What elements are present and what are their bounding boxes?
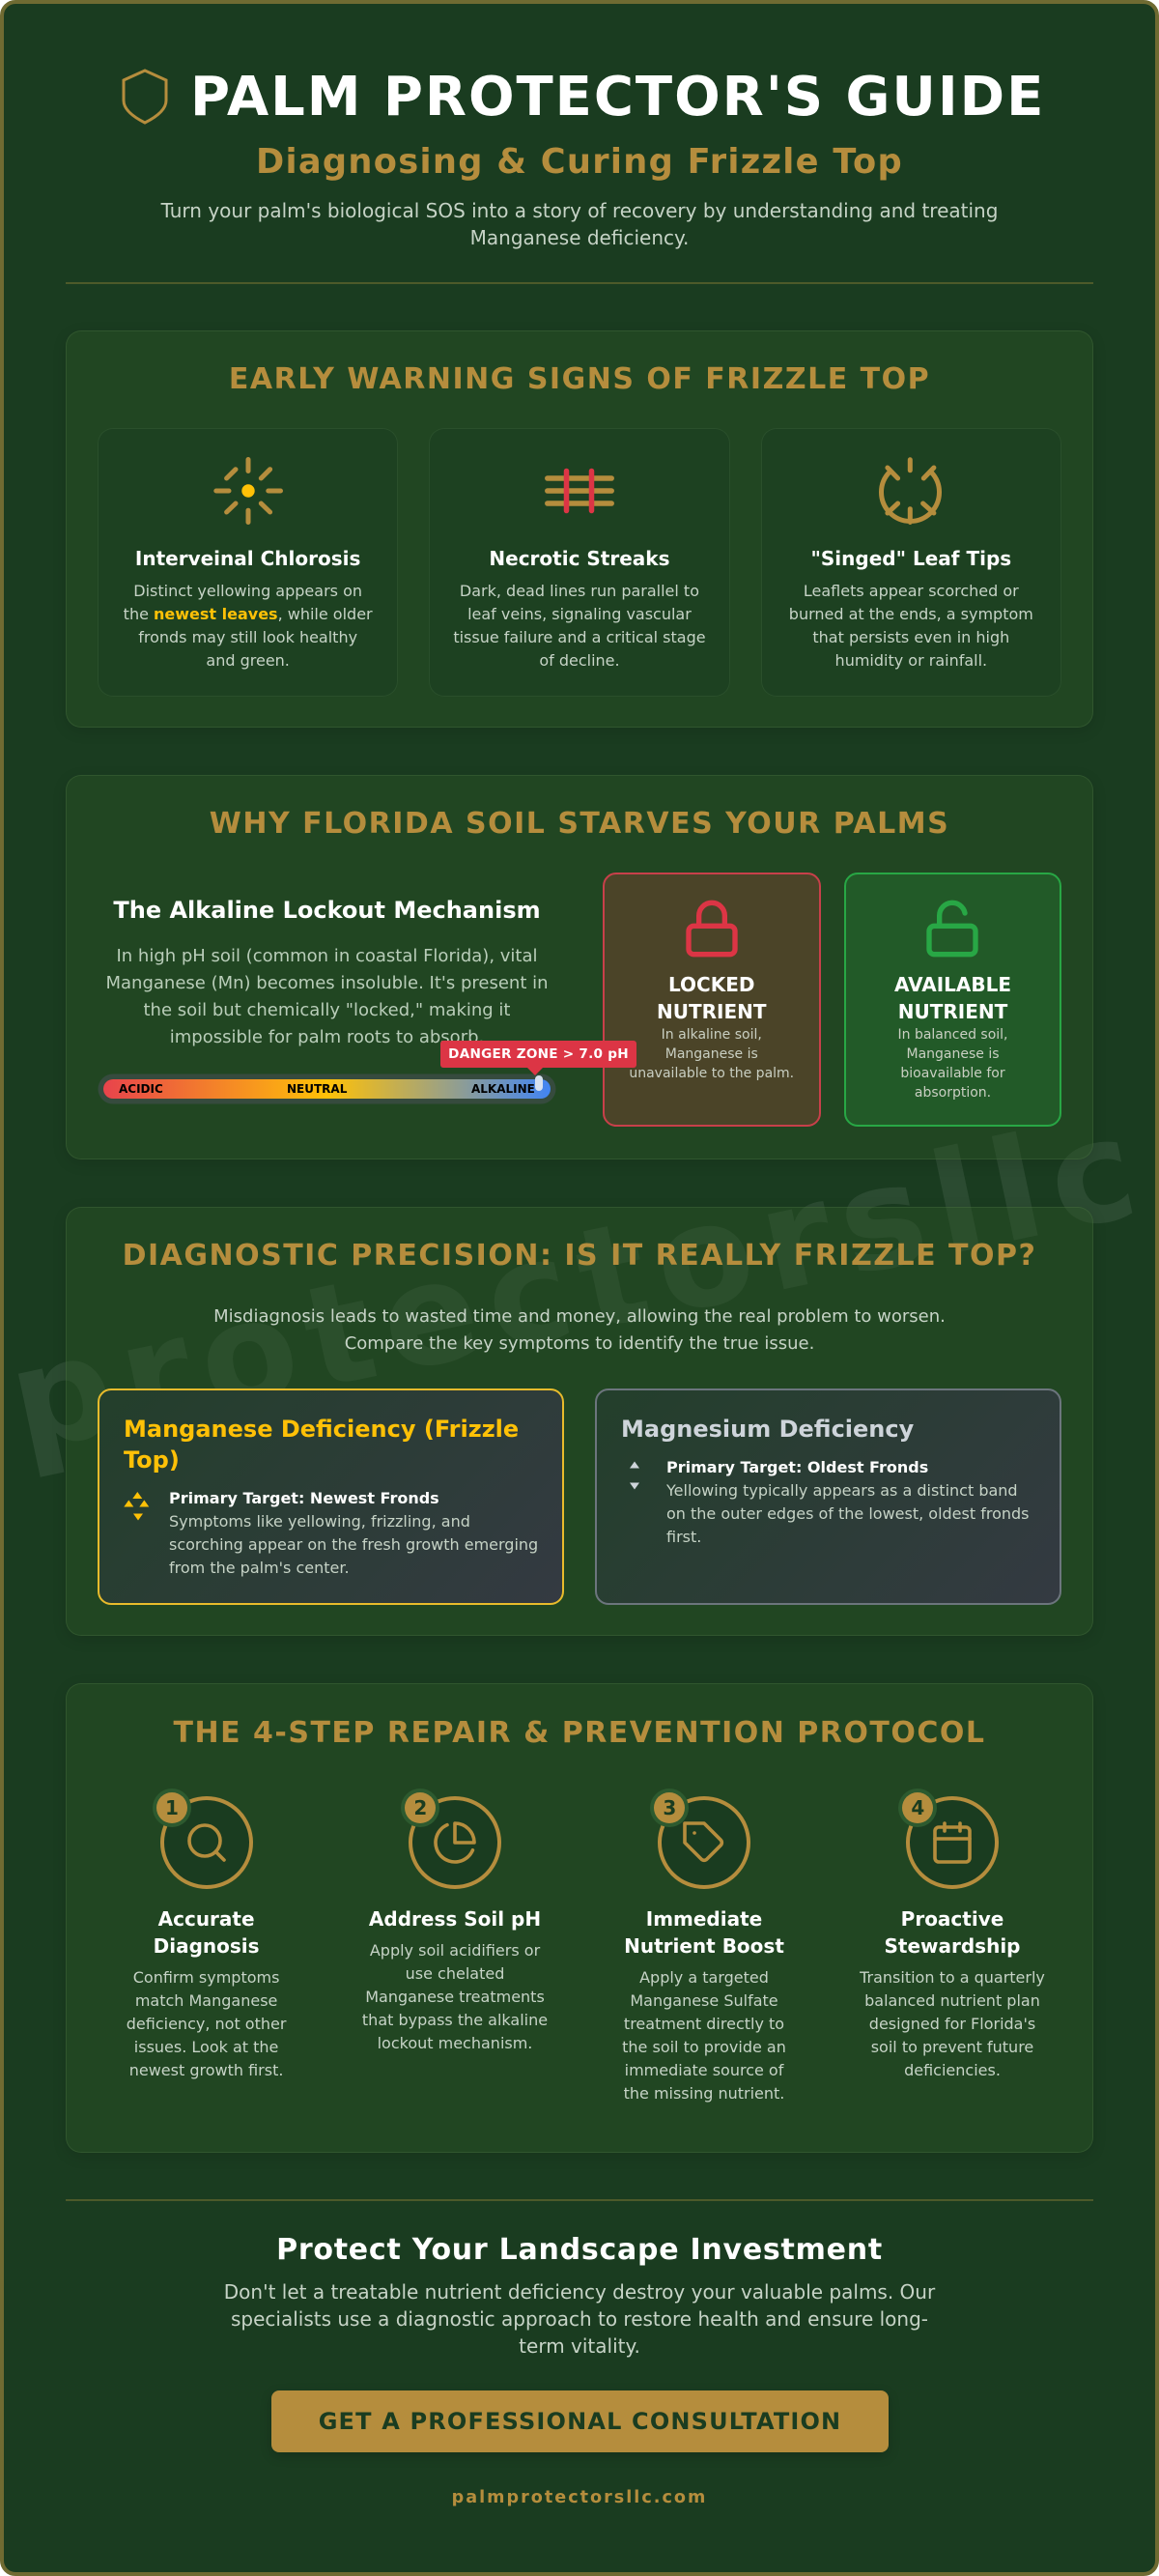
card heading: Top)	[124, 1446, 180, 1474]
panel: why florida soil starves	[66, 775, 1093, 1159]
heading: diagnostic precision: DIAGNOSTIC PRECISION: IS IT REALLY FRIZZLE TOP?	[123, 1239, 1036, 1273]
card: singed leaf tips	[761, 428, 1061, 697]
step text: lockout mechanism.	[378, 2034, 532, 2052]
lockout text: In high pH soil (common in coastal Florida), vital	[116, 946, 538, 966]
card text: leaf veins, signaling vascular	[467, 605, 692, 623]
card text: first.	[666, 1528, 701, 1546]
title: PALM PROTECTOR'S GUIDE	[190, 66, 1045, 129]
step text: Transition to a quarterly	[860, 1968, 1045, 1987]
available text: bioavailable for	[900, 1066, 1005, 1081]
step text: soil to prevent future	[871, 2038, 1033, 2056]
step text: use chelated	[406, 1964, 504, 1983]
step title: Stewardship	[885, 1934, 1020, 1958]
card text: of decline.	[539, 651, 620, 670]
step text: the soil to provide an	[622, 2038, 786, 2056]
step ring	[160, 1796, 253, 1889]
card text: burned at the ends, a symptom	[789, 605, 1033, 623]
card text: Leaflets appear scorched or	[804, 582, 1019, 600]
card: available nutrient	[844, 873, 1061, 1127]
lockout text: the soil but chemically "locked," making it	[143, 1000, 510, 1020]
subtitle: Diagnosing & Curing Frizzle Top	[256, 142, 903, 182]
intro text	[160, 199, 998, 249]
card heading: Manganese Deficiency (Frizzle	[124, 1416, 519, 1443]
step ring	[906, 1796, 999, 1889]
step title	[885, 1907, 1020, 1958]
step title	[154, 1907, 260, 1958]
step text: newest growth first.	[129, 2061, 283, 2079]
card text: Symptoms like yellowing, frizzling, and	[169, 1512, 470, 1531]
danger label	[440, 1041, 636, 1068]
footer call to action	[224, 2233, 935, 2507]
step text: Manganese treatments	[365, 1988, 545, 2006]
footer text: Don't let a treatable nutrient deficiency destroy your valuable palms. Our	[224, 2280, 935, 2304]
card text	[666, 1481, 1030, 1546]
footer heading: Protect Your Landscape Investment	[276, 2233, 883, 2267]
icon: shield	[122, 69, 168, 125]
intro text	[213, 1306, 946, 1354]
heading: florida soil: WHY FLORIDA SOIL STARVES YOUR PALMS	[210, 807, 949, 841]
intro text: Manganese deficiency.	[470, 226, 689, 249]
card text: that persists even in high	[812, 628, 1009, 646]
lockout text: impossible for palm roots to absorb.	[170, 1027, 484, 1047]
icon: up and down arrows	[124, 1492, 149, 1521]
card text: scorching appear on the fresh growth emerging	[169, 1535, 538, 1554]
locked text: unavailable to the palm.	[629, 1066, 794, 1081]
icon: chlorosis sun	[213, 457, 283, 525]
step text: Apply a targeted	[639, 1968, 769, 1987]
step badge: 3	[663, 1796, 676, 1819]
step title: Address Soil pH	[369, 1907, 541, 1931]
card text: Yellowing typically appears as a distinct band	[666, 1481, 1018, 1500]
step title: Proactive	[901, 1907, 1004, 1931]
step badge	[654, 1792, 685, 1823]
step ring	[409, 1796, 501, 1889]
step text: deficiencies.	[904, 2061, 1001, 2079]
icon: up and down arrows	[630, 1461, 639, 1490]
available text: In balanced soil,	[898, 1027, 1008, 1043]
marker	[535, 1075, 543, 1091]
card: locked nutrient	[603, 873, 821, 1127]
card text	[124, 582, 373, 670]
step badge	[405, 1792, 436, 1823]
available text: absorption.	[915, 1085, 991, 1101]
step title	[624, 1907, 784, 1958]
lockout text: Manganese (Mn) becomes insoluble. It's present in	[105, 973, 549, 993]
footer text	[224, 2280, 935, 2358]
locked title: LOCKED	[668, 973, 754, 996]
step text: designed for Florida's	[869, 2015, 1035, 2033]
step text: balanced nutrient plan	[864, 1991, 1040, 2010]
card text: Dark, dead lines run parallel to	[460, 582, 699, 600]
locked text: In alkaline soil,	[662, 1027, 762, 1043]
step text: the missing nutrient.	[624, 2084, 784, 2103]
card text	[453, 582, 706, 670]
card text: humidity or rainfall.	[835, 651, 987, 670]
card title: Necrotic Streaks	[489, 547, 669, 570]
panel: diagnostic precision	[66, 1207, 1093, 1636]
available text	[898, 1027, 1008, 1101]
step 2	[362, 1789, 548, 2052]
card: necrotic streaks	[429, 428, 730, 697]
pH gauge	[99, 1041, 636, 1103]
icon: calendar	[933, 1821, 972, 1864]
card text: tissue failure and a critical stage	[453, 628, 706, 646]
card text	[169, 1512, 538, 1577]
gauge track	[103, 1079, 551, 1099]
heading: early warning signs: EARLY WARNING SIGNS OF FRIZZLE TOP	[229, 362, 930, 396]
card title: "Singed" Leaf Tips	[810, 547, 1011, 570]
locked title: NUTRIENT	[657, 1000, 767, 1023]
card heading	[124, 1416, 519, 1474]
card title: Interveinal Chlorosis	[135, 547, 360, 570]
step text: immediate source of	[625, 2061, 783, 2079]
danger label: DANGER ZONE > 7.0 pH	[448, 1046, 629, 1062]
card: manganese deficiency	[98, 1388, 564, 1605]
step text: Confirm symptoms	[133, 1968, 279, 1987]
step badge: 4	[911, 1796, 924, 1819]
step title: Accurate	[158, 1907, 255, 1931]
step text	[127, 1968, 286, 2079]
card text: fronds may still look healthy	[138, 628, 357, 646]
header	[122, 66, 1045, 249]
available title: AVAILABLE	[894, 973, 1011, 996]
step 4	[860, 1789, 1045, 2079]
available title	[894, 973, 1011, 1023]
step 1	[127, 1789, 286, 2079]
icon: magnifier	[187, 1823, 226, 1862]
card: magnesium deficiency	[595, 1388, 1061, 1605]
danger arrow	[527, 1068, 543, 1075]
intro text: Compare the key symptoms to identify the true issue.	[345, 1333, 814, 1354]
card heading: Magnesium Deficiency	[621, 1416, 914, 1443]
panel: early warning signs	[66, 330, 1093, 728]
step text: Manganese Sulfate	[630, 1991, 778, 2010]
locked text	[629, 1027, 794, 1081]
button	[271, 2390, 889, 2452]
icon: tag	[683, 1821, 724, 1863]
step text: Apply soil acidifiers or	[370, 1941, 540, 1960]
intro text: Misdiagnosis leads to wasted time and money, allowing the real problem to worsen.	[213, 1306, 946, 1327]
icon: streaks	[545, 468, 614, 514]
step text: match Manganese	[135, 1991, 277, 2010]
step text: that bypass the alkaline	[362, 2011, 548, 2029]
step text: issues. Look at the	[134, 2038, 278, 2056]
target label: Primary Target: Oldest Fronds	[666, 1458, 928, 1476]
label: acidic: ACIDIC	[119, 1082, 163, 1096]
card: interveinal chlorosis	[98, 428, 398, 697]
icon: open lock	[926, 901, 978, 957]
step text	[362, 1941, 548, 2052]
button: GET A PROFESSIONAL CONSULTATION	[319, 2408, 841, 2435]
label: neutral: NEUTRAL	[287, 1082, 347, 1096]
label: alkaline: ALKALINE	[471, 1082, 535, 1096]
icon: closed lock	[686, 901, 738, 957]
available text: Manganese is	[906, 1046, 1000, 1062]
locked title	[657, 973, 767, 1023]
step badge	[156, 1792, 187, 1823]
website url: palmprotectorsllc.com	[452, 2488, 707, 2507]
step text: treatment directly to	[624, 2015, 784, 2033]
card text: and green.	[206, 651, 290, 670]
locked text: Manganese is	[665, 1046, 758, 1062]
step 3	[622, 1789, 786, 2103]
step title: Diagnosis	[154, 1934, 260, 1958]
step title: Immediate	[646, 1907, 762, 1931]
heading: protocol: THE 4-STEP REPAIR & PREVENTION PROTOCOL	[174, 1716, 985, 1750]
lockout text	[105, 946, 549, 1047]
footer text: specialists use a diagnostic approach to restore health and ensure long-	[231, 2307, 928, 2331]
panel: 4-step protocol	[66, 1683, 1093, 2153]
card text	[789, 582, 1033, 670]
card text: the newest leaves, while older	[124, 605, 373, 623]
step badge	[902, 1792, 933, 1823]
step badge: 2	[413, 1796, 427, 1819]
icon: singed tips	[879, 457, 942, 525]
subheading: lockout mechanism: The Alkaline Lockout Mechanism	[113, 897, 541, 924]
step text: deficiency, not other	[127, 2015, 286, 2033]
card text: on the outer edges of the lowest, oldest fronds	[666, 1504, 1030, 1523]
footer text: term vitality.	[519, 2334, 640, 2358]
step text	[622, 1968, 786, 2103]
step badge: 1	[165, 1796, 179, 1819]
icon: pie chart	[434, 1821, 476, 1864]
step ring	[658, 1796, 750, 1889]
card text: from the palm's center.	[169, 1559, 350, 1577]
target label: Primary Target: Newest Fronds	[169, 1489, 439, 1507]
intro text: Turn your palm's biological SOS into a story of recovery by understanding and treating	[161, 199, 998, 222]
available title: NUTRIENT	[898, 1000, 1007, 1023]
step text	[860, 1968, 1045, 2079]
step title: Nutrient Boost	[624, 1934, 784, 1958]
card text: Distinct yellowing appears on	[133, 582, 362, 600]
